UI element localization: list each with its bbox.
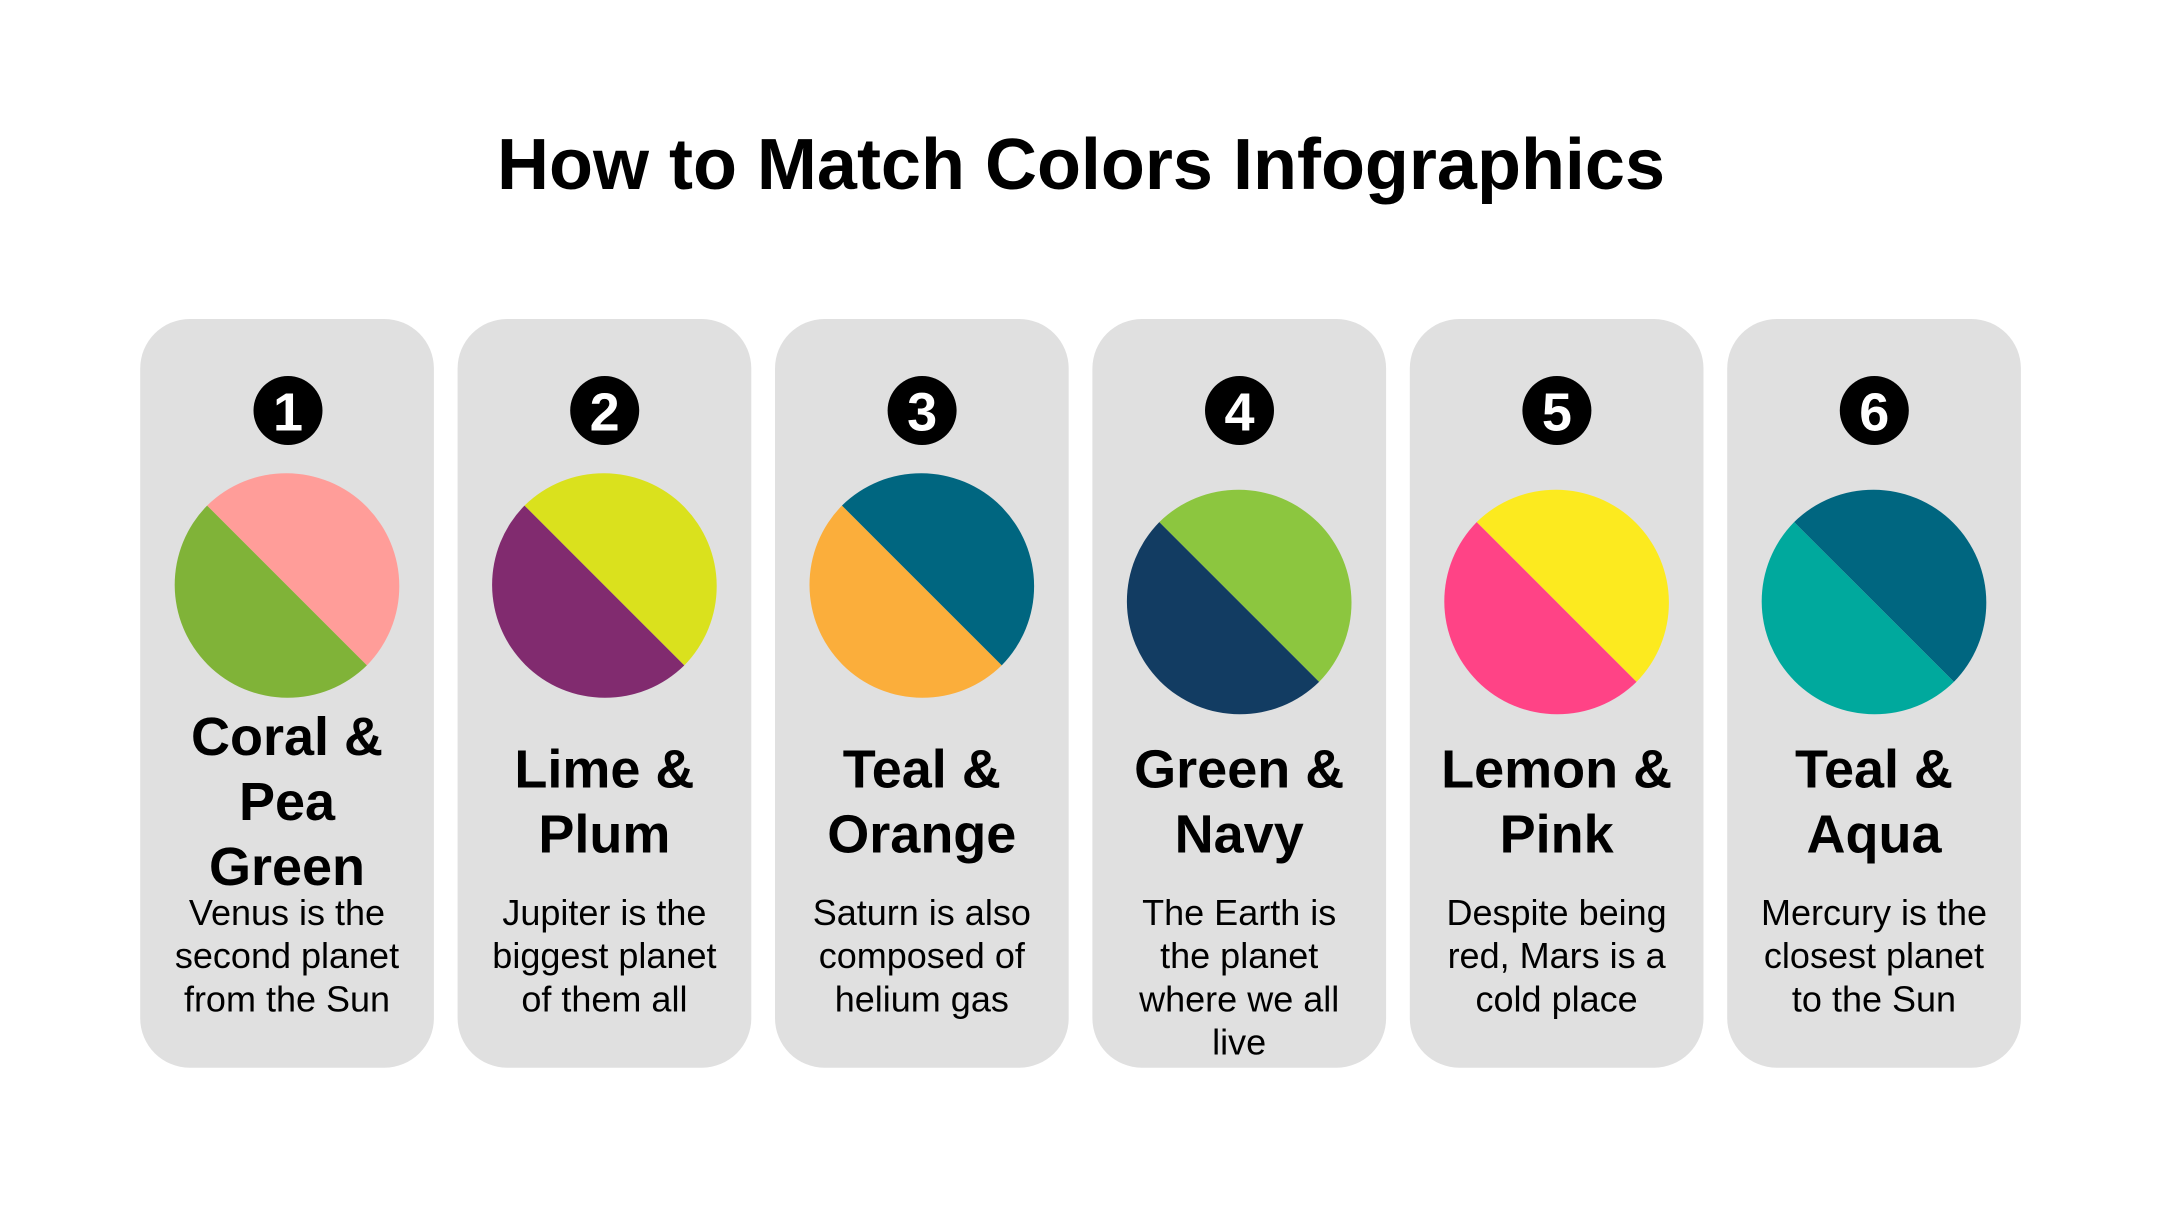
description (1761, 892, 1987, 1019)
icon: number 5 badge (1522, 376, 1591, 445)
description: where we all (1138, 978, 1339, 1019)
panel: Lemon & Pink (1410, 319, 1704, 1068)
description: the planet (1160, 935, 1318, 976)
description (1138, 892, 1339, 1063)
icon: color swatch green and navy (1127, 490, 1351, 714)
heading: Plum (538, 804, 670, 864)
heading (191, 707, 383, 897)
icon: number 5 badge: 5 (1542, 382, 1572, 442)
description: Mercury is the (1761, 892, 1987, 933)
heading: Green & (1134, 740, 1344, 800)
description: of them all (521, 978, 687, 1019)
description (813, 892, 1031, 1019)
heading: Pea (239, 772, 336, 832)
icon: color swatch coral and pea green (175, 473, 399, 698)
description: Despite being (1447, 892, 1667, 933)
panel: Coral & Pea Green (140, 319, 434, 1068)
description (175, 892, 399, 1019)
heading: Aqua (1806, 804, 1942, 864)
heading (1795, 740, 1953, 864)
heading: Pink (1500, 804, 1615, 864)
icon: color swatch lemon and pink (1444, 490, 1669, 714)
description: cold place (1476, 978, 1638, 1019)
heading (514, 740, 694, 864)
heading: Lemon & (1441, 740, 1672, 800)
description: red, Mars is a (1448, 935, 1667, 976)
icon: color swatch lime and plum (492, 473, 717, 698)
description: to the Sun (1792, 978, 1956, 1019)
icon: number 3 badge: 3 (907, 382, 937, 442)
description: closest planet (1764, 935, 1984, 976)
icon: number 1 badge (254, 376, 322, 445)
description: second planet (175, 935, 399, 976)
description: helium gas (835, 978, 1009, 1019)
heading: Orange (827, 804, 1016, 864)
description: The Earth is (1142, 892, 1336, 933)
description: Jupiter is the (502, 892, 706, 933)
heading: Coral & (191, 707, 383, 767)
description: live (1212, 1022, 1266, 1063)
icon: number 2 badge: 2 (590, 382, 620, 442)
heading: Lime & (514, 740, 694, 800)
heading (1441, 740, 1672, 864)
panel: Lime & Plum (458, 319, 751, 1068)
heading: Navy (1175, 804, 1304, 864)
description: Venus is the (189, 892, 385, 933)
heading (827, 740, 1016, 864)
description: Saturn is also (813, 892, 1031, 933)
description (492, 892, 716, 1019)
icon: number 4 badge (1205, 376, 1274, 445)
heading: Green (209, 837, 365, 897)
description: biggest planet (492, 935, 716, 976)
icon: number 3 badge (888, 376, 957, 445)
icon: color swatch teal and aqua (1762, 490, 1986, 714)
heading: Teal & (1795, 740, 1953, 800)
description: composed of (819, 935, 1026, 976)
icon: number 6 badge (1840, 376, 1909, 445)
icon: number 4 badge: 4 (1224, 382, 1255, 442)
description (1447, 892, 1667, 1019)
description: from the Sun (184, 978, 390, 1019)
heading: Teal & (843, 740, 1001, 800)
icon: number 1 badge: 1 (273, 382, 303, 442)
icon: color swatch teal and orange (809, 473, 1034, 698)
panel: Teal & Aqua (1727, 319, 2021, 1068)
icon: number 6 badge: 6 (1859, 382, 1889, 442)
panel: Teal & Orange (775, 319, 1069, 1068)
icon: number 2 badge (570, 376, 639, 445)
heading (1134, 740, 1344, 864)
panel: Green & Navy (1092, 319, 1386, 1068)
title: How to Match Colors Infographics (497, 125, 1665, 205)
